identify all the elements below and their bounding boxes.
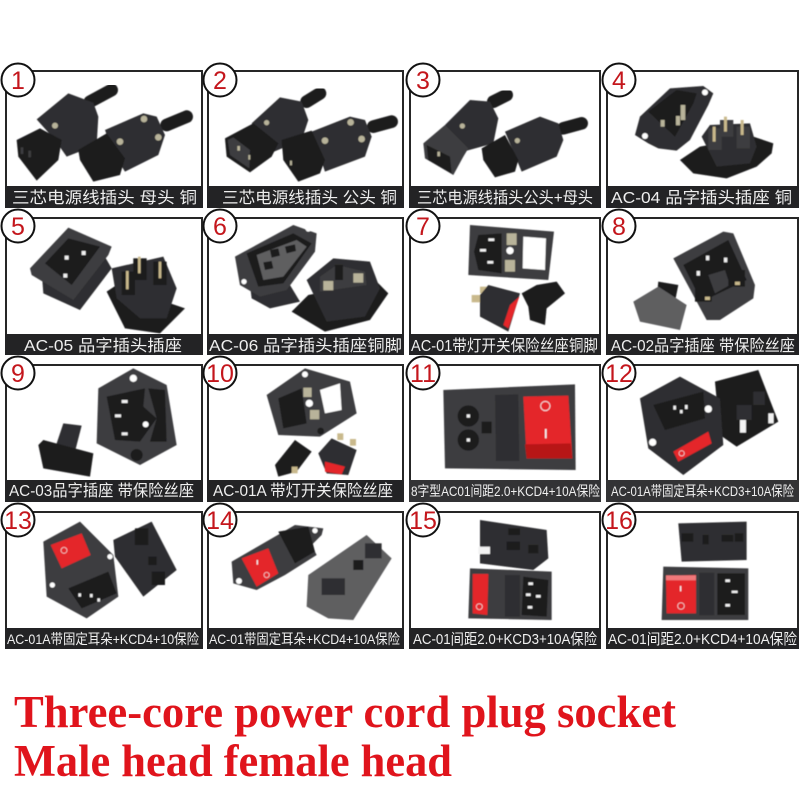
number badge 16: 16: [605, 507, 633, 535]
caption 2: [207, 186, 404, 208]
panel 15: [406, 504, 601, 649]
number badge 10: 10: [206, 360, 234, 388]
caption 5: [5, 334, 203, 355]
panel 1: [2, 64, 203, 208]
panel 13: [2, 504, 203, 649]
number badge 3: 3: [416, 67, 430, 95]
product photo 15: narrow switch socket: [468, 520, 552, 620]
caption 5: AC-05 品字插头插座: [24, 337, 182, 355]
number badge 4: 4: [612, 67, 626, 95]
product photo 2: male plugs: [225, 93, 392, 182]
number badge 7: 7: [416, 213, 430, 241]
panel 8: [602, 210, 799, 355]
number badge 9: 9: [11, 360, 25, 388]
number badge 1: [2, 64, 34, 96]
number badge 9: [2, 356, 34, 390]
number badge 1: 1: [11, 67, 25, 95]
panel 7: [406, 210, 601, 355]
panel 11: [406, 356, 601, 502]
caption 6: AC-06 品字插头插座铜脚: [209, 337, 402, 355]
caption 13: AC-01A带固定耳朵+KCD4+10保险: [7, 631, 199, 647]
panel 5: [2, 210, 203, 355]
panel 2: [204, 64, 404, 208]
number badge 2: [204, 64, 236, 96]
number badge 11: [406, 356, 440, 390]
number badge 4: [602, 64, 636, 96]
panel 12: [602, 356, 799, 502]
number badge 12: 12: [605, 360, 633, 388]
product photo 10: socket and switch parts: [267, 368, 357, 477]
product photo 3: male and female plugs: [423, 95, 582, 177]
caption 7: AC-01带灯开关保险丝座铜脚: [411, 337, 598, 355]
caption 14: [207, 628, 404, 649]
title: [14, 687, 676, 786]
product photo 7: fused socket with switch: [468, 225, 565, 332]
caption 1: [5, 186, 203, 208]
number badge 3: [406, 64, 440, 96]
product photo 13: eared socket with red switch: [43, 522, 177, 618]
caption 3: 三芯电源线插头公头+母头: [417, 189, 593, 207]
caption 10: AC-01A 带灯开关保险丝座: [213, 482, 393, 500]
caption 9: AC-03品字插座 带保险丝座: [9, 482, 194, 500]
caption 11: [409, 480, 601, 502]
number badge 15: 15: [409, 507, 437, 535]
caption 13: [5, 628, 203, 649]
caption 4: AC-04 品字插头插座 铜: [611, 189, 792, 207]
number badge 2: 2: [213, 67, 227, 95]
product photo 14: horizontal eared socket: [232, 525, 392, 620]
product photo 12: eared socket with switch: [640, 370, 778, 475]
title: Three-core power cord plug socket: [14, 687, 676, 737]
caption 15: AC-01间距2.0+KCD3+10A保险: [413, 631, 597, 648]
product photo 11: figure-8 socket with red switch: [443, 384, 576, 470]
number badge 11: 11: [410, 360, 436, 388]
product photo 6: female flanged sockets: [235, 225, 388, 332]
caption 1: 三芯电源线插头 母头 铜: [12, 189, 197, 207]
panel 16: [602, 504, 799, 649]
caption 11: 8字型AC01间距2.0+KCD4+10A保险: [411, 483, 600, 499]
product photo 16: wide switch socket: [662, 522, 748, 620]
number badge 5: [2, 210, 34, 242]
number badge 6: 6: [213, 213, 227, 241]
caption 8: AC-02品字插座 带保险丝座: [611, 337, 795, 355]
panel 10: [204, 356, 404, 502]
number badge 8: [602, 210, 636, 242]
panel 4: [602, 64, 799, 208]
number badge 8: 8: [612, 213, 626, 241]
panel 6: [204, 210, 404, 355]
caption 4: [606, 186, 799, 208]
product photo 5: snap-in sockets: [30, 228, 185, 333]
caption 14: AC-01带固定耳朵+KCD4+10A保险: [209, 631, 400, 647]
product photo 9: hex socket with fuse holder: [38, 368, 177, 477]
panel 3: [406, 64, 601, 208]
panel 14: [204, 504, 404, 649]
number badge 13: 13: [4, 507, 32, 535]
product photo 8: socket with fuse holder: [633, 232, 755, 330]
number badge 7: [406, 210, 440, 242]
number badge 6: [204, 210, 236, 242]
product photo 4: flanged sockets: [635, 86, 773, 178]
number badge 14: 14: [206, 507, 234, 535]
number badge 5: 5: [11, 213, 25, 241]
product photo 1: female plugs: [17, 90, 187, 182]
panel 9: [2, 356, 203, 502]
caption 2: 三芯电源线插头 公头 铜: [222, 189, 397, 207]
title: Male head female head: [14, 736, 452, 786]
